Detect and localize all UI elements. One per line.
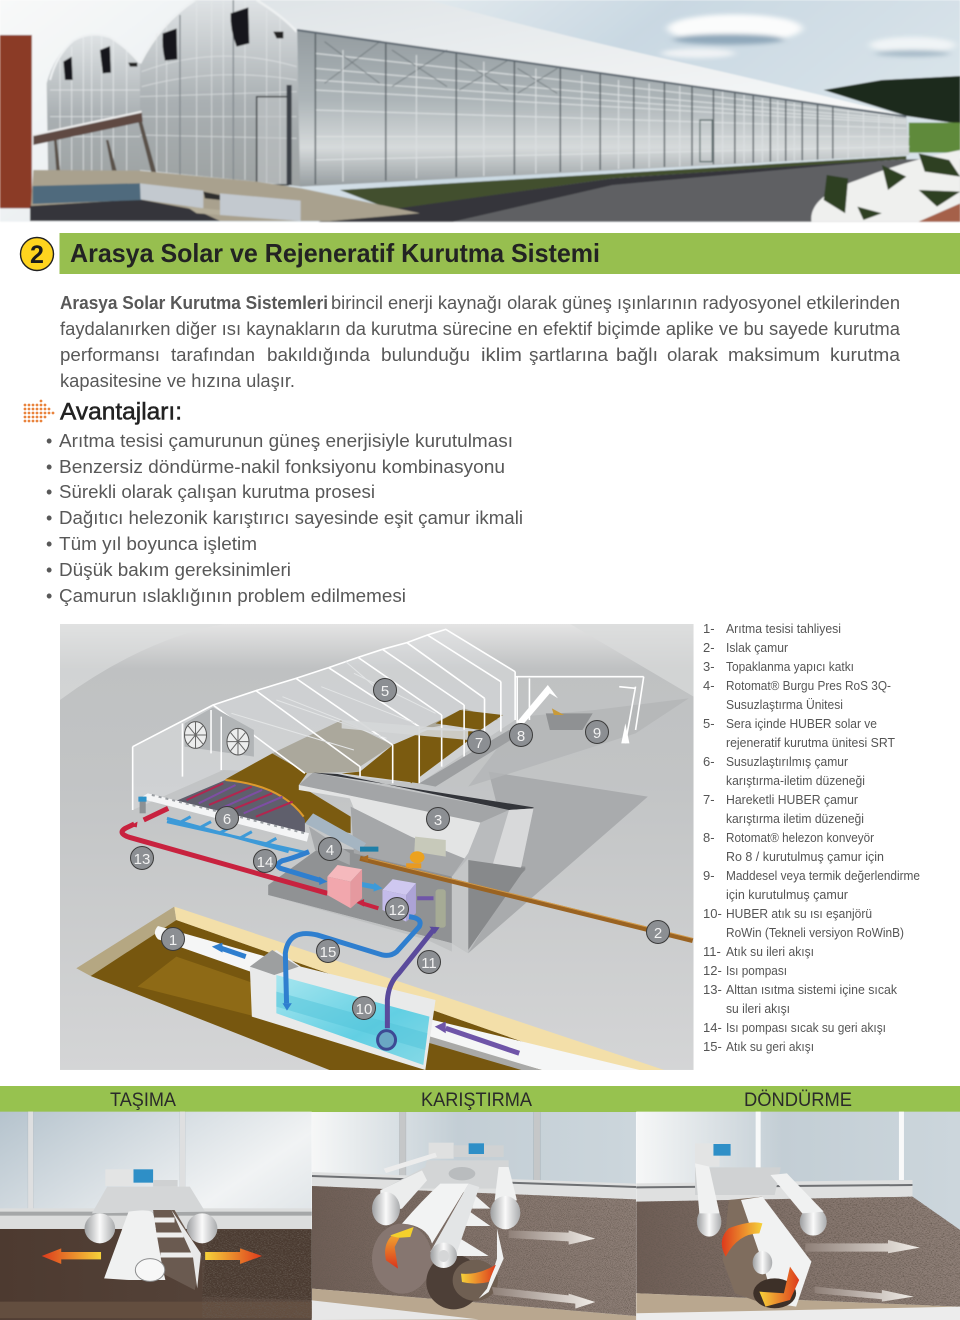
trench xyxy=(76,907,176,976)
legend: numbered components: 7- xyxy=(703,792,715,807)
legend: numbered components: Topaklanma yapıcı katkı xyxy=(726,659,854,674)
list: advantages: • xyxy=(46,431,52,451)
legend: numbered components: karıştırma iletim düzeneği xyxy=(726,811,864,826)
shadows xyxy=(468,772,648,953)
arrows outward xyxy=(42,1248,101,1264)
markers 1-15: 8 xyxy=(517,728,525,745)
legend: numbered components xyxy=(703,621,920,1054)
markers 1-15: 15 xyxy=(320,944,336,961)
legend: numbered components: Ro 8 / kurutulmuş çamur için xyxy=(726,849,884,864)
greenhouse frames xyxy=(133,629,515,810)
heading bar: system title: Arasya Solar ve Rejeneratif Kurutma Sistemi xyxy=(70,238,600,268)
discharge blue pipe xyxy=(285,917,420,1003)
legend: numbered components: su ileri akışı xyxy=(726,1001,790,1016)
legend: numbered components: Susuzlaştırma Ünitesi xyxy=(726,697,843,712)
legend: numbered components: Atık su ileri akışı xyxy=(726,944,814,959)
exchanger tube xyxy=(436,889,446,928)
markers 1-15: 5 xyxy=(381,683,389,700)
rolling machine rail xyxy=(342,720,468,740)
intro paragraph: tarafından xyxy=(171,345,255,365)
machine head xyxy=(105,1169,133,1186)
diagram artwork xyxy=(60,624,694,1070)
blue flow rails xyxy=(167,818,309,853)
legend: numbered components: 8- xyxy=(703,830,715,845)
markers 1-15: 4 xyxy=(326,842,334,859)
legend: numbered components: Isı pompası sıcak su geri akışı xyxy=(726,1020,886,1035)
legend: numbered components: Islak çamur xyxy=(726,640,789,655)
markers 1-15: 1 xyxy=(169,932,177,949)
ladder fins xyxy=(455,1195,490,1256)
curved arrows xyxy=(722,1222,762,1257)
intro paragraph: maksimum xyxy=(728,345,820,365)
fan units xyxy=(185,707,254,757)
central screw xyxy=(153,1210,202,1290)
legend: numbered components: 12- xyxy=(703,963,722,978)
arched gable ends xyxy=(47,0,302,187)
fans xyxy=(162,28,177,61)
heat pump pink box xyxy=(327,865,362,882)
mixing screw trough xyxy=(140,793,309,842)
list: advantages: • xyxy=(46,508,52,528)
legend: numbered components: 2- xyxy=(703,640,715,655)
flow arrows xyxy=(221,948,246,957)
machine head xyxy=(695,1143,720,1167)
markers 1-15: 2 xyxy=(654,925,662,942)
output shed xyxy=(515,677,644,743)
list: advantages: • xyxy=(46,457,52,477)
photo: greenhouse exterior xyxy=(0,0,960,222)
icon: orange dotted arrow xyxy=(25,401,53,425)
hall building xyxy=(268,847,525,943)
intro paragraph: olarak xyxy=(667,345,719,365)
floor heating area xyxy=(174,780,305,833)
greenhouse floor bands xyxy=(225,753,351,833)
white pipe xyxy=(155,926,266,975)
markers 1-15: 12 xyxy=(389,902,405,919)
photo: turning mode xyxy=(636,1112,960,1320)
markers 1-15: 10 xyxy=(356,1001,372,1018)
heat pump purple box xyxy=(382,879,416,895)
background sky, trees and roof xyxy=(0,0,960,222)
badge: section number 2 xyxy=(20,238,54,270)
turned soil column xyxy=(723,1197,772,1307)
legend: numbered components: Susuzlaştırılmış çamur xyxy=(726,754,849,769)
intro paragraph: iklim xyxy=(481,345,522,365)
photo: mixing mode xyxy=(312,1112,636,1320)
right side ground xyxy=(340,156,906,210)
drums xyxy=(697,1207,721,1237)
drums xyxy=(85,1213,115,1243)
list: advantages: Düşük bakım gereksinimleri xyxy=(59,560,291,580)
legend: numbered components: 14- xyxy=(703,1020,722,1035)
list: advantages: • xyxy=(46,534,52,554)
band: operation mode headings: DÖNDÜRME xyxy=(744,1090,852,1111)
photo: transport mode xyxy=(0,1112,312,1320)
legend: numbered components: Arıtma tesisi tahliyesi xyxy=(726,621,841,636)
list: advantages: • xyxy=(46,560,52,580)
heading: advantages: Avantajları: xyxy=(60,398,182,426)
intro paragraph: bulunduğu xyxy=(381,345,470,365)
legend: numbered components: Hareketli HUBER çamur xyxy=(726,792,859,807)
markers 1-15: 11 xyxy=(421,955,437,972)
diagram: drying system cutaway xyxy=(60,624,694,1070)
heading bar: system title xyxy=(60,233,960,274)
list: advantages: Sürekli olarak çalışan kurutma prosesi xyxy=(59,482,375,502)
intro paragraph: faydalanırken diğer ısı kaynakların da kurutma sürecine en efektif biçimde aplike ve bu sayede kurutma xyxy=(60,319,901,339)
legend: numbered components: Rotomat® Burgu Pres RoS 3Q- xyxy=(726,678,891,693)
markers 1-15: 9 xyxy=(593,725,601,742)
rotomat press xyxy=(305,813,366,852)
long side wall xyxy=(297,30,960,222)
list: advantages: • xyxy=(46,586,52,606)
cross-section xyxy=(453,1260,498,1301)
flow chamber xyxy=(250,950,436,1070)
intro paragraph xyxy=(60,293,901,391)
thickening unit xyxy=(414,837,446,857)
legend: numbered components: 13- xyxy=(703,982,722,997)
legend: numbered components: 4- xyxy=(703,678,715,693)
legend: numbered components: Atık su geri akışı xyxy=(726,1039,814,1054)
markers 1-15: 3 xyxy=(434,812,442,829)
list: advantages: Dağıtıcı helezonik karıştırıcı sayesinde eşit çamur ikmali xyxy=(59,508,523,528)
legend: numbered components: HUBER atık su ısı eşanjörü xyxy=(726,906,872,921)
legend: numbered components: 1- xyxy=(703,621,715,636)
white movement arrows xyxy=(805,1240,920,1253)
list: advantages: Arıtma tesisi çamurunun güneş enerjisiyle kurutulması xyxy=(59,431,513,451)
legend: numbered components: 9- xyxy=(703,868,715,883)
left ground, ramp and concrete blocks xyxy=(30,112,420,221)
legend: numbered components: 5- xyxy=(703,716,715,731)
drums xyxy=(380,1170,427,1212)
list: advantages: Çamurun ıslaklığının problem edilmemesi xyxy=(59,586,406,606)
legend: numbered components: için kurutulmuş çamur xyxy=(726,887,849,902)
list: advantages xyxy=(46,431,523,606)
legend: numbered components: Isı pompası xyxy=(726,963,787,978)
blue return pipe xyxy=(278,852,321,881)
markers 1-15: 6 xyxy=(223,811,231,828)
legend: numbered components: 11- xyxy=(703,944,721,959)
legend: numbered components: 15- xyxy=(703,1039,722,1054)
intro paragraph: kapasitesine ve hızına ulaşır. xyxy=(60,371,295,391)
badge: section number 2: 2 xyxy=(30,241,44,269)
list: advantages: • xyxy=(46,482,52,502)
legend: numbered components: Sera içinde HUBER solar ve xyxy=(726,716,877,731)
markers 1-15: 14 xyxy=(257,854,273,871)
list: advantages: Benzersiz döndürme-nakil fonksiyonu kombinasyonu xyxy=(59,457,505,477)
band: operation mode headings xyxy=(0,1086,960,1112)
intro paragraph: bakıldığında xyxy=(267,345,371,365)
big casing xyxy=(402,1184,469,1244)
legend: numbered components: RoWin (Tekneli versiyon RoWinB) xyxy=(726,925,904,940)
white movement arrows xyxy=(509,1230,595,1245)
intro paragraph: bağlı xyxy=(616,345,658,365)
band: operation mode headings: TAŞIMA xyxy=(110,1090,176,1111)
legend: numbered components: karıştırma-iletim düzeneği xyxy=(726,773,865,788)
legend: numbered components: rejeneratif kurutma ünitesi SRT xyxy=(726,735,895,750)
legend: numbered components: Alttan ısıtma sistemi içine sıcak xyxy=(726,982,897,997)
purple intake pipe xyxy=(387,928,435,1028)
legend: numbered components: Rotomat® helezon konveyör xyxy=(726,830,875,845)
curved arrows xyxy=(390,1227,414,1238)
trench cut xyxy=(372,1224,432,1294)
polymer dosing xyxy=(410,851,425,863)
intro paragraph: birincil enerji kaynağı olarak güneş ışınlarının radyosyonel etkilerinden xyxy=(331,293,900,313)
markers 1-15 xyxy=(130,678,670,1020)
intro paragraph: performansı xyxy=(60,345,160,365)
machine head xyxy=(429,1143,454,1159)
sludge pipe xyxy=(360,858,693,941)
red heating pipe xyxy=(122,824,327,893)
intro paragraph: şartlarına xyxy=(529,345,609,365)
legend: numbered components: 10- xyxy=(703,906,722,921)
legend: numbered components: 6- xyxy=(703,754,715,769)
glass panes xyxy=(133,629,515,810)
band: operation mode headings: KARIŞTIRMA xyxy=(421,1090,532,1111)
markers 1-15: 7 xyxy=(475,735,483,752)
markers 1-15: 13 xyxy=(134,851,150,868)
legend: numbered components: 3- xyxy=(703,659,715,674)
intro paragraph: Arasya Solar Kurutma Sistemleri xyxy=(60,293,328,313)
list: advantages: Tüm yıl boyunca işletim xyxy=(59,534,257,554)
intro paragraph: kurutma xyxy=(830,345,901,365)
legend: numbered components: Maddesel veya termik değerlendirme xyxy=(726,868,920,883)
